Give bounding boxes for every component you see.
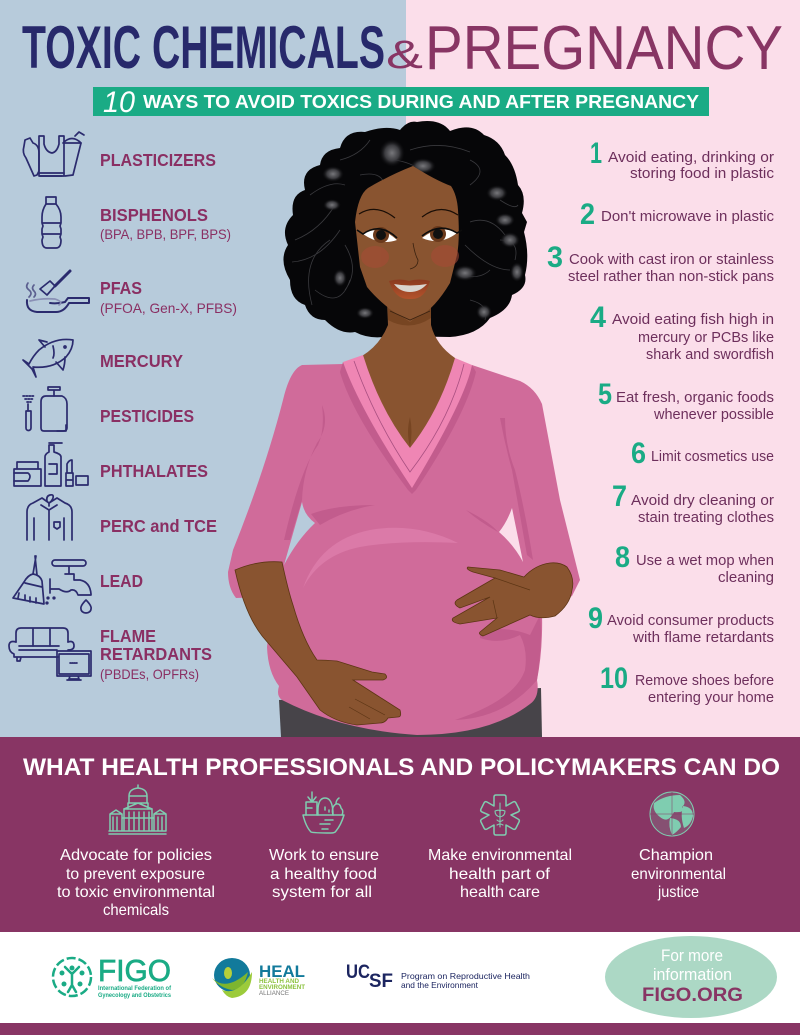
tip 5: 5 [598,378,612,411]
icon: plastics [23,132,84,176]
tip 5: Eat fresh, organic foods [616,390,774,406]
tip 2: 2 [580,198,595,231]
tip 6: Limit cosmetics use [651,449,774,465]
text: advocate: Advocate for policies [60,847,212,864]
belly shadow [455,615,541,720]
icon: globe [650,792,694,836]
arm shadow left [284,405,325,540]
tip 8 [615,541,774,586]
logo: ucsf: SF [369,971,393,992]
hair [283,121,527,337]
tip 7: 7 [612,480,627,513]
banner: 10 ways [93,86,709,119]
tip 1: Avoid eating, drinking or [608,150,774,166]
icon: sprayer [23,387,67,431]
tip 6: 6 [631,437,646,470]
logo: ucsf [346,962,530,992]
icon: bottle [42,197,61,248]
tip 10: 10 [600,662,628,695]
background: pink half [406,0,800,737]
text: justice: Champion [639,847,713,864]
tip 10: Remove shoes before [635,673,774,689]
label: pfas: PFAS [100,278,142,298]
title: TOXIC CHEMICALS [22,14,385,81]
callout: more information [605,936,777,1018]
gap: right of belly [499,508,523,562]
label: pesticides: PESTICIDES [100,406,194,426]
tip 9: Avoid consumer products [607,613,774,629]
logo: figo: FIGO [98,953,171,988]
icon: fish [23,339,73,377]
background: blue half [0,0,406,737]
label: plasticizers: PLASTICIZERS [100,150,216,170]
logo: ucsf: and the Environment [401,980,479,990]
tip 5 [598,378,774,423]
text: food system [269,847,379,901]
text: justice: justice [657,884,699,901]
mouth [389,280,430,299]
tip 4: mercury or PCBs like [638,330,774,346]
callout: more information: FIGO.ORG [642,985,743,1006]
tip 7: stain treating clothes [638,510,774,526]
panel: footer [0,932,800,1023]
logo: heal: ENVIRONMENT [259,984,305,991]
label: bisphenols: BISPHENOLS [100,205,208,225]
label: flame retardants: (PBDEs, OPFRs) [100,666,199,682]
icon: frying pan [27,271,89,312]
panel: ten ways list [547,137,774,706]
tip 2 [580,198,774,231]
label: flame retardants [100,626,212,682]
under-bust folds [311,505,498,532]
icon: cosmetics [14,443,88,486]
arm and hand left [235,562,401,725]
tip 9: with flame retardants [632,630,774,646]
tip 6 [631,437,774,470]
illustration: pregnant woman [228,121,580,737]
panel: chemical list [9,132,237,682]
arm shadow right [500,418,533,560]
label: bisphenols: (BPA, BPB, BPF, BPS) [100,226,231,242]
belly highlight [303,528,458,588]
icon: food basket [303,792,344,833]
collar shadow [340,362,476,494]
banner: 10 ways: 10 [103,86,135,119]
jaw line [390,311,430,320]
tip 1 [590,137,774,182]
text: environmental health: health care [460,884,540,901]
logo: figo: International Federation of [98,985,172,992]
tip 10 [600,662,774,706]
label: bisphenols [100,205,231,242]
tip 2: Don't microwave in plastic [601,209,774,225]
tip 9: 9 [588,602,603,635]
text: food system: system for all [272,884,372,901]
tip 3: Cook with cast iron or stainless [569,252,774,268]
text: advocate [57,847,215,919]
label: flame retardants: RETARDANTS [100,644,212,664]
text: justice [631,847,726,901]
gap: left of belly [284,502,315,565]
label: lead: LEAD [100,571,143,591]
panel: what professionals can do [0,737,800,932]
blush [361,245,459,268]
label: pfas [100,278,237,316]
logo: ucsf: UC [346,962,370,983]
eyes [357,226,462,243]
footer bar [0,1023,800,1035]
heading: WHAT HEALTH PROFESSIONALS AND POLICYMAKERS CAN DO [23,754,780,781]
tip 4: shark and swordfish [646,347,774,363]
callout: more information: For more [661,946,723,965]
tip 9 [588,602,774,646]
arm and hand right [452,563,573,636]
logo: heal: ALLIANCE [259,991,289,997]
tip 8: 8 [615,541,630,574]
logo: figo: Gynecology and Obstetrics [98,992,171,999]
face [355,166,459,319]
hair strands [292,140,518,320]
tip 1: 1 [590,137,602,170]
label: flame retardants: FLAME [100,626,156,646]
icon: shirt on hanger [27,495,72,540]
nose [410,243,418,269]
eyebrows [359,209,458,218]
logo: figo [53,953,172,999]
tip 3 [547,241,774,285]
icon: broom and tap [13,556,91,613]
cleavage [408,417,412,447]
tip 7: Avoid dry cleaning or [631,493,774,509]
collar line [354,361,464,472]
sweater [228,364,580,735]
logo: heal: HEAL [259,962,305,981]
icon: capitol building [109,785,166,834]
tip 1: storing food in plastic [630,166,774,182]
logo: heal: HEALTH AND [259,978,299,985]
tip 4: 4 [590,301,606,334]
icon: star of life [481,795,519,835]
tip 8: cleaning [718,570,774,586]
label: phthalates: PHTHALATES [100,461,208,481]
text: food system: Work to ensure [269,847,379,864]
chin shadow [388,306,431,326]
callout: more information: information [653,965,732,984]
label: mercury: MERCURY [100,351,183,371]
text: advocate: to prevent exposure [66,866,205,883]
text: environmental health: Make environmental [428,847,572,864]
label: perc and tce: PERC and TCE [100,516,217,536]
finger lines [349,578,530,719]
text: environmental health: health part of [449,866,551,883]
text: advocate: chemicals [103,902,169,919]
collar [343,355,472,488]
tip 3: 3 [547,241,563,274]
icon: sofa and monitor [9,628,91,680]
text: food system: a healthy food [270,866,377,883]
tip 4: Avoid eating fish high in [612,312,774,328]
hair shine [322,139,524,320]
logo: ucsf: Program on Reproductive Health [401,971,530,981]
banner: 10 ways: WAYS TO AVOID TOXICS DURING AND AFTER PREGNANCY [143,92,699,112]
tip 3: steel rather than non-stick pans [568,269,774,285]
logo: heal [212,958,305,998]
tip 4 [590,301,774,363]
text: justice: environmental [631,866,726,883]
text: advocate: to toxic environmental [57,884,215,901]
tip 8: Use a wet mop when [636,553,774,569]
tip 5: whenever possible [653,407,774,423]
title: & [386,33,423,77]
tip 10: entering your home [648,690,774,706]
tip 7 [612,480,774,526]
label: pfas: (PFOA, Gen-X, PFBS) [100,300,237,316]
text: environmental health [428,847,572,901]
pants [279,688,542,737]
neck [344,300,470,452]
